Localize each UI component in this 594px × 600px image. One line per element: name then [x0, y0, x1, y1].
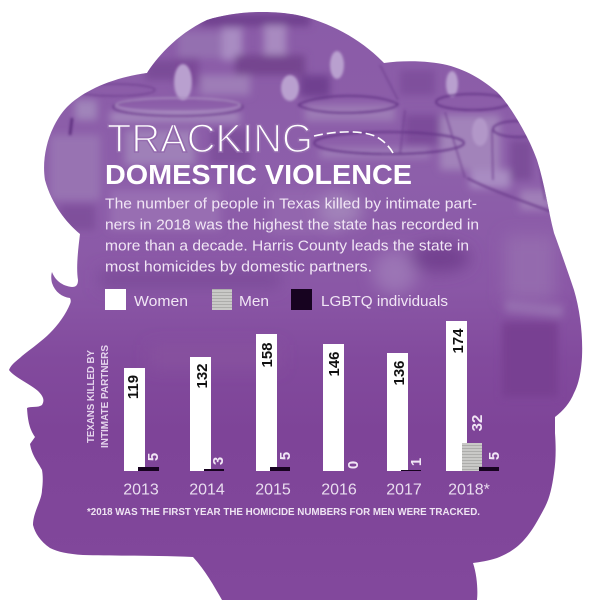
bar chart [123, 321, 503, 498]
legend: Women [134, 293, 188, 310]
legend [105, 289, 448, 310]
footnote: *2018 WAS THE FIRST YEAR THE HOMICIDE NUMBERS FOR MEN WERE TRACKED. [87, 506, 480, 518]
values: women: 119 [125, 375, 142, 399]
title line: DOMESTIC VIOLENCE: DOMESTIC VIOLENCE [105, 159, 412, 190]
values: others: 5 [486, 452, 503, 460]
intro text: The number of people in Texas killed by intimate part- [105, 196, 477, 212]
intro text: most homicides by domestic partners. [105, 258, 372, 276]
bars: women [124, 321, 467, 471]
photo: soft mottling [50, 14, 550, 235]
photo: lower glass [502, 299, 564, 397]
year labels: 2017 [386, 482, 422, 498]
legend: LGBTQ individuals [321, 293, 448, 310]
intro text [105, 196, 479, 276]
title [105, 117, 412, 190]
axis label: TEXANS KILLED BY [85, 350, 97, 443]
values: women: 136 [391, 360, 408, 386]
photo: flames [174, 51, 488, 146]
year labels: 2014 [189, 482, 225, 498]
year labels [123, 482, 490, 498]
year labels: 2018* [448, 482, 490, 498]
values: others: 3 [210, 457, 227, 465]
values: women: 158 [259, 342, 276, 368]
values: women: 132 [194, 363, 211, 389]
year labels: 2015 [255, 482, 291, 498]
values: others: 5 [145, 453, 162, 461]
axis label: INTIMATE PARTNERS [99, 345, 111, 448]
values: others: 32 [469, 415, 486, 431]
bars: LGBTQ [138, 467, 499, 471]
axis label [85, 345, 111, 448]
title line: TRACKING: TRACKING [107, 117, 313, 161]
values: others: 5 [277, 452, 294, 460]
values: others: 1 [408, 458, 425, 466]
values: others [145, 415, 503, 469]
values: women: 174 [450, 328, 467, 354]
photo: glass rims [70, 65, 552, 212]
legend: Men [239, 293, 269, 310]
values: women [125, 328, 467, 399]
year labels: 2013 [123, 482, 159, 498]
year labels: 2016 [321, 482, 357, 498]
values: women: 146 [326, 351, 343, 377]
dashed arc [314, 132, 393, 153]
intro text: more than a decade. Harris County leads the state in [105, 238, 469, 254]
intro text: ners in 2018 was the highest the state has recorded in [105, 216, 479, 234]
bars: men [462, 443, 482, 471]
values: others: 0 [345, 461, 362, 469]
